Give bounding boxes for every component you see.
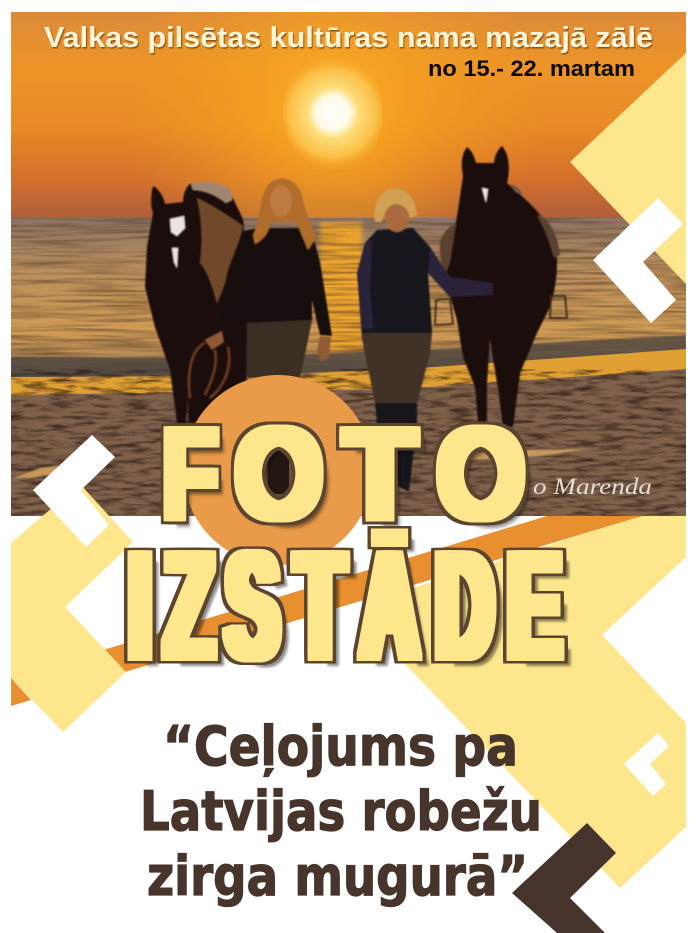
title: IZSTĀDE: Ā	[361, 521, 418, 691]
orange triangle bottom left	[11, 678, 31, 706]
yellow chevron top right	[570, 53, 686, 284]
stirrups	[435, 296, 567, 325]
white chevron left	[33, 435, 115, 547]
icon: left horse blaze	[170, 216, 185, 268]
title: IZSTĀDE: Z	[165, 521, 213, 691]
exhibition name: Latvijas robežu	[140, 780, 542, 843]
woman face	[270, 185, 292, 217]
title: IZSTĀDE: I	[129, 521, 151, 691]
brown chevron bottom right	[512, 823, 616, 933]
photo seen through letter O	[265, 450, 292, 496]
exhibition name	[140, 715, 542, 908]
white chevron top right	[593, 198, 683, 323]
sea	[11, 218, 686, 378]
orange circle	[183, 375, 373, 565]
title: IZSTĀDE: S	[226, 521, 279, 691]
title: FOTO: T	[344, 403, 416, 546]
title: FOTO	[160, 403, 532, 546]
title: IZSTĀDE	[124, 521, 572, 691]
right horse	[435, 146, 567, 427]
title: FOTO: O	[235, 403, 323, 546]
big yellow shape right	[375, 516, 686, 888]
woman face	[385, 202, 409, 232]
title: FOTO: O	[437, 403, 525, 546]
orange stripe	[103, 516, 642, 672]
exhibition name: zirga mugurā”	[147, 845, 528, 908]
heading: venue: Valkas pilsētas kultūras nama mazajā zālē	[44, 22, 653, 54]
white chevron bottom right	[624, 733, 669, 796]
heading: dates: no 15.- 22. martam	[428, 56, 635, 81]
left horse	[145, 182, 247, 424]
reins	[189, 343, 229, 398]
title: IZSTĀDE: D	[436, 521, 493, 691]
icon: sun	[283, 62, 383, 164]
sand beach	[11, 349, 686, 516]
exhibition name: “Ceļojums pa	[163, 715, 518, 778]
icon: right horse blaze	[482, 188, 488, 203]
right woman	[357, 188, 493, 492]
photographer signature: o Marenda	[533, 474, 652, 499]
title: IZSTĀDE: T	[296, 521, 344, 691]
title: IZSTĀDE: E	[508, 521, 561, 691]
title: FOTO: F	[162, 403, 218, 546]
left woman	[203, 179, 332, 378]
panel: sunset beach photo with horses and riders	[11, 12, 686, 516]
yellow chevron left	[11, 484, 133, 732]
sky	[11, 12, 686, 219]
